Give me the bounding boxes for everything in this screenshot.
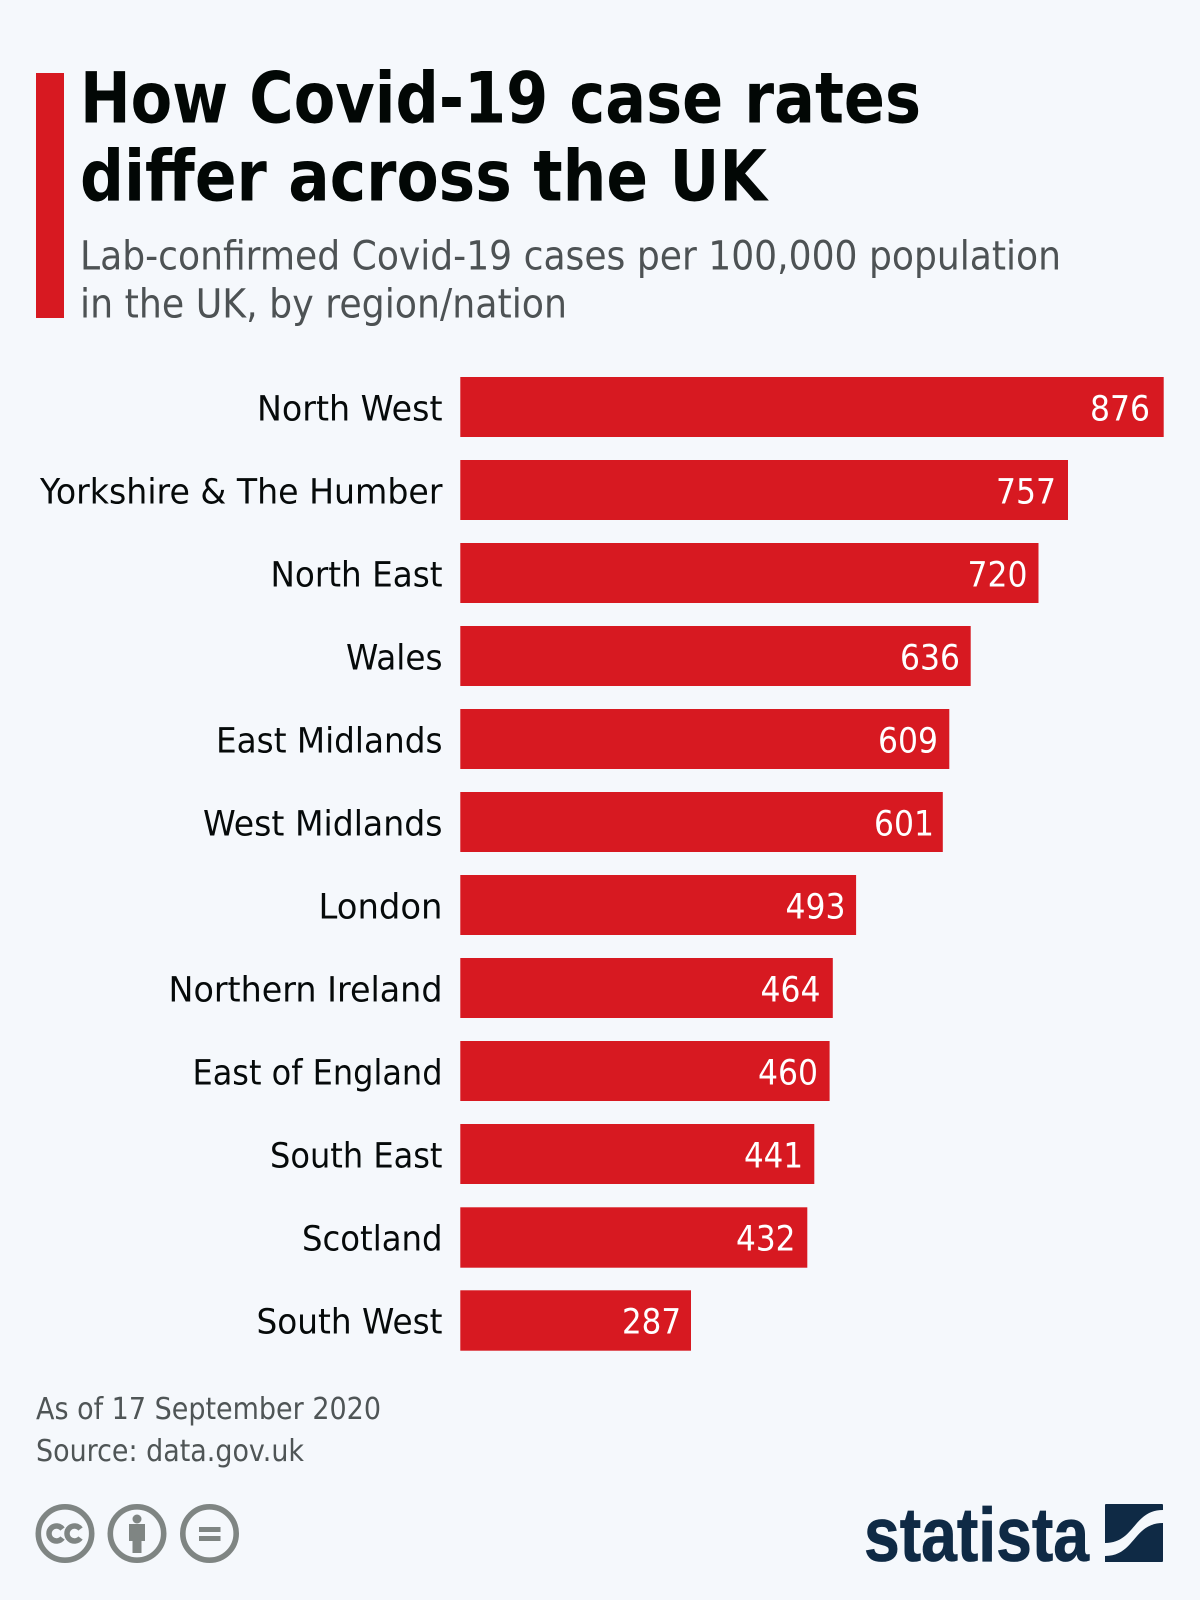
row: East Midlands: East Midlands xyxy=(216,722,442,762)
subtitle xyxy=(80,234,1061,328)
row: Yorkshire & The Humber: 757 xyxy=(996,472,1056,512)
row: Scotland: Scotland xyxy=(302,1220,442,1260)
row: South West: 287 xyxy=(622,1302,681,1342)
row: West Midlands xyxy=(203,792,943,852)
row: Northern Ireland: 464 xyxy=(760,970,820,1010)
subtitle: in the UK, by region/nation xyxy=(80,282,567,328)
row: West Midlands: West Midlands xyxy=(203,804,442,844)
icon: no derivatives xyxy=(183,1507,236,1560)
row: North West: North West xyxy=(257,390,442,430)
title xyxy=(80,58,921,218)
row: South West: South West xyxy=(256,1302,442,1342)
subtitle: Lab-confirmed Covid-19 cases per 100,000 population xyxy=(80,234,1061,280)
row: South West xyxy=(256,1290,691,1351)
row: Scotland: 432 xyxy=(736,1220,796,1260)
row: Wales: 636 xyxy=(900,638,960,678)
source note: Source: data.gov.uk xyxy=(36,1434,305,1469)
row: Scotland xyxy=(302,1207,807,1268)
row: South East xyxy=(270,1124,814,1184)
source note: As of 17 September 2020 xyxy=(36,1392,381,1427)
row: North East: 720 xyxy=(968,556,1028,596)
row: Northern Ireland: Northern Ireland xyxy=(168,970,442,1010)
source note xyxy=(36,1392,381,1469)
row: East of England: 460 xyxy=(758,1054,818,1094)
row: South East: 441 xyxy=(744,1136,803,1176)
row: South East: South East xyxy=(270,1136,442,1176)
row: Wales xyxy=(346,626,971,686)
row: East of England xyxy=(192,1041,830,1101)
bar chart xyxy=(39,377,1164,1351)
title: How Covid-19 case rates xyxy=(80,58,921,140)
statista logo: statista xyxy=(864,1493,1090,1578)
row: North West xyxy=(257,377,1164,437)
header accent bar xyxy=(36,73,64,318)
row: Northern Ireland xyxy=(168,958,833,1018)
row: Yorkshire & The Humber: Yorkshire & The Humber xyxy=(39,472,443,512)
row: West Midlands: 601 xyxy=(874,804,934,844)
row: East Midlands: 609 xyxy=(878,722,938,762)
icon: attribution xyxy=(110,1507,164,1560)
row: London: London xyxy=(318,888,442,928)
row: Wales: Wales xyxy=(346,638,442,678)
row: North East xyxy=(270,543,1038,603)
row: East of England: East of England xyxy=(192,1054,442,1094)
row: Yorkshire & The Humber xyxy=(39,460,1068,520)
row: London xyxy=(318,875,856,935)
row: East Midlands xyxy=(216,709,949,769)
icon: creative commons xyxy=(38,1507,92,1560)
title: differ across the UK xyxy=(80,136,769,218)
row: North West: 876 xyxy=(1090,390,1150,430)
row: North East: North East xyxy=(270,556,442,596)
row: London: 493 xyxy=(786,888,846,928)
